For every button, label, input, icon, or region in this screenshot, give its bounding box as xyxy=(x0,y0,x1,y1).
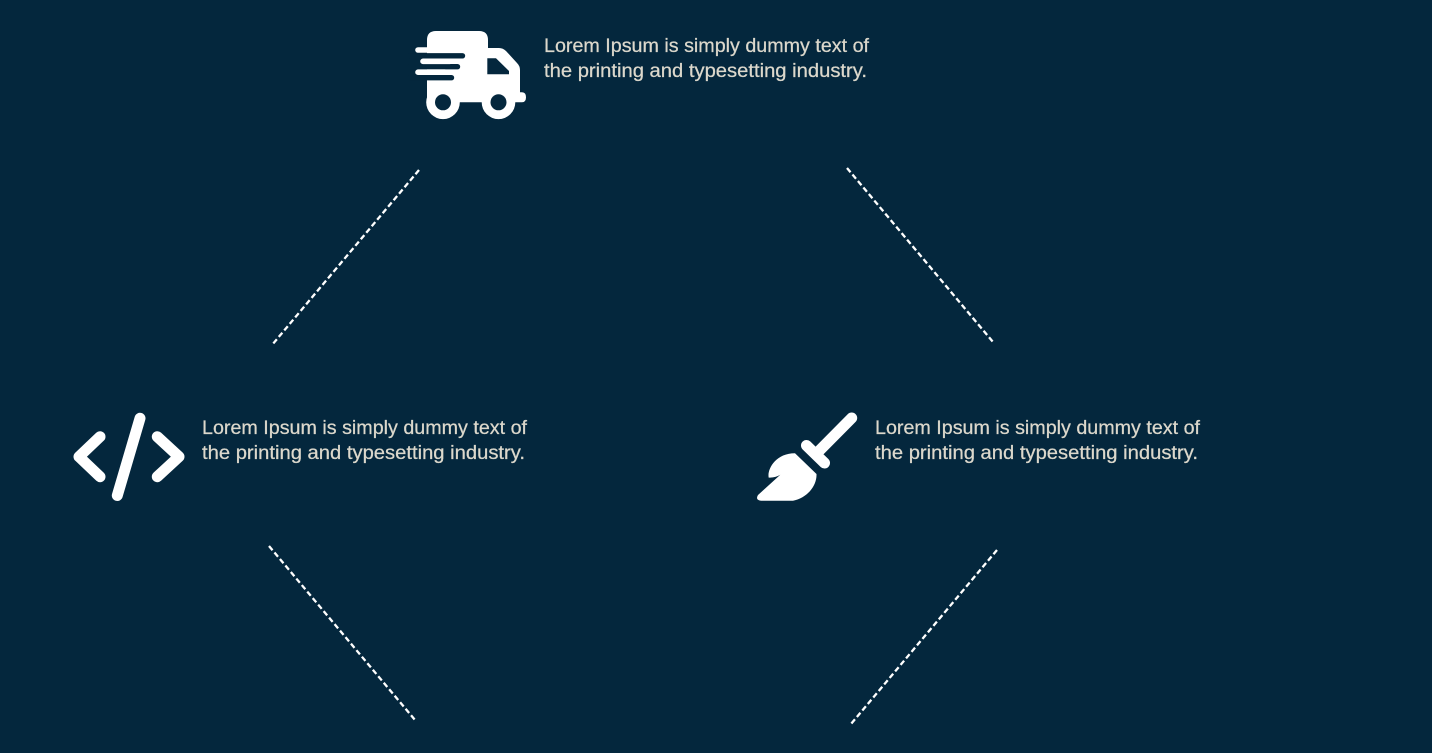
icon: code brackets xyxy=(79,418,179,496)
text block: broom second line: the printing and typesetting industry. xyxy=(875,442,1198,464)
arrow: dashed connector bottom-left xyxy=(269,546,415,720)
text block: code second line: the printing and typesetting industry. xyxy=(202,442,525,464)
icon: delivery truck xyxy=(410,31,526,119)
text block: delivery second line: the printing and typesetting industry. xyxy=(544,60,867,82)
icon: broom xyxy=(757,418,852,501)
arrow: dashed connector top-left xyxy=(272,170,419,345)
text block: code: Lorem Ipsum is simply dummy text of xyxy=(202,417,528,439)
arrow: dashed connector bottom-right xyxy=(851,550,997,724)
text block: broom: Lorem Ipsum is simply dummy text of xyxy=(875,417,1201,439)
arrow: dashed connector top-right xyxy=(847,168,993,342)
text block: delivery: Lorem Ipsum is simply dummy text of xyxy=(544,35,870,57)
